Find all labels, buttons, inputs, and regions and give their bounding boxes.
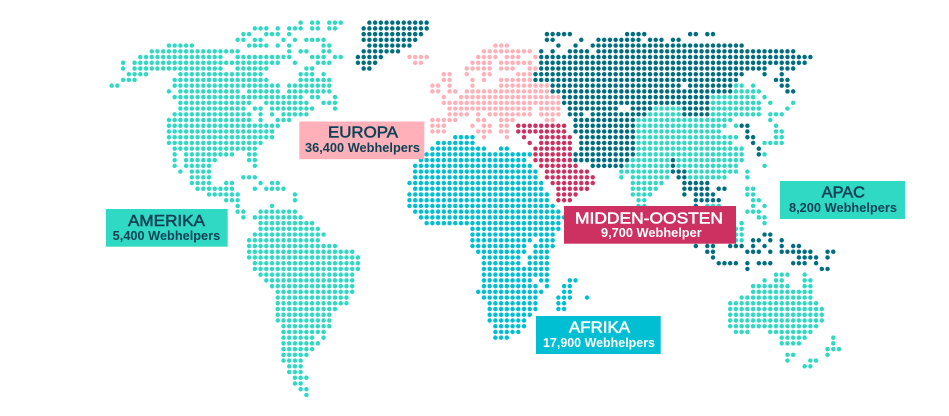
label: Amerika: 5,400 Webhelpers bbox=[113, 229, 220, 243]
label: Afrika: 17,900 Webhelpers bbox=[543, 336, 655, 350]
region dots: Americas, teal bbox=[112, 23, 358, 395]
label: Europa bbox=[299, 122, 424, 159]
label: APAC: 8,200 Webhelpers bbox=[789, 201, 897, 215]
label: Afrika bbox=[536, 316, 661, 354]
label: Europa: 36,400 Webhelpers bbox=[305, 141, 420, 155]
region dots: Greenland and northern Asia, dark teal bbox=[358, 23, 833, 269]
region dots: Europe, pink bbox=[409, 46, 558, 137]
label: APAC: APAC bbox=[822, 185, 865, 202]
region dots: Middle East, crimson bbox=[518, 126, 593, 200]
dotted world map bbox=[112, 23, 839, 395]
label: Amerika bbox=[106, 209, 228, 247]
region dots: Africa, cyan bbox=[409, 137, 587, 338]
label: Afrika: AFRIKA bbox=[569, 320, 630, 337]
label: Midden-Oosten: MIDDEN-OOSTEN bbox=[575, 211, 723, 228]
label: Amerika: AMERIKA bbox=[128, 213, 205, 230]
label: Midden-Oosten: 9,700 Webhelper bbox=[601, 226, 702, 240]
label: Europa: EUROPA bbox=[328, 124, 398, 142]
region dots: Asia-Pacific and Australia, teal bbox=[621, 86, 839, 366]
label: Midden-Oosten bbox=[564, 206, 736, 244]
label: APAC bbox=[780, 181, 905, 219]
